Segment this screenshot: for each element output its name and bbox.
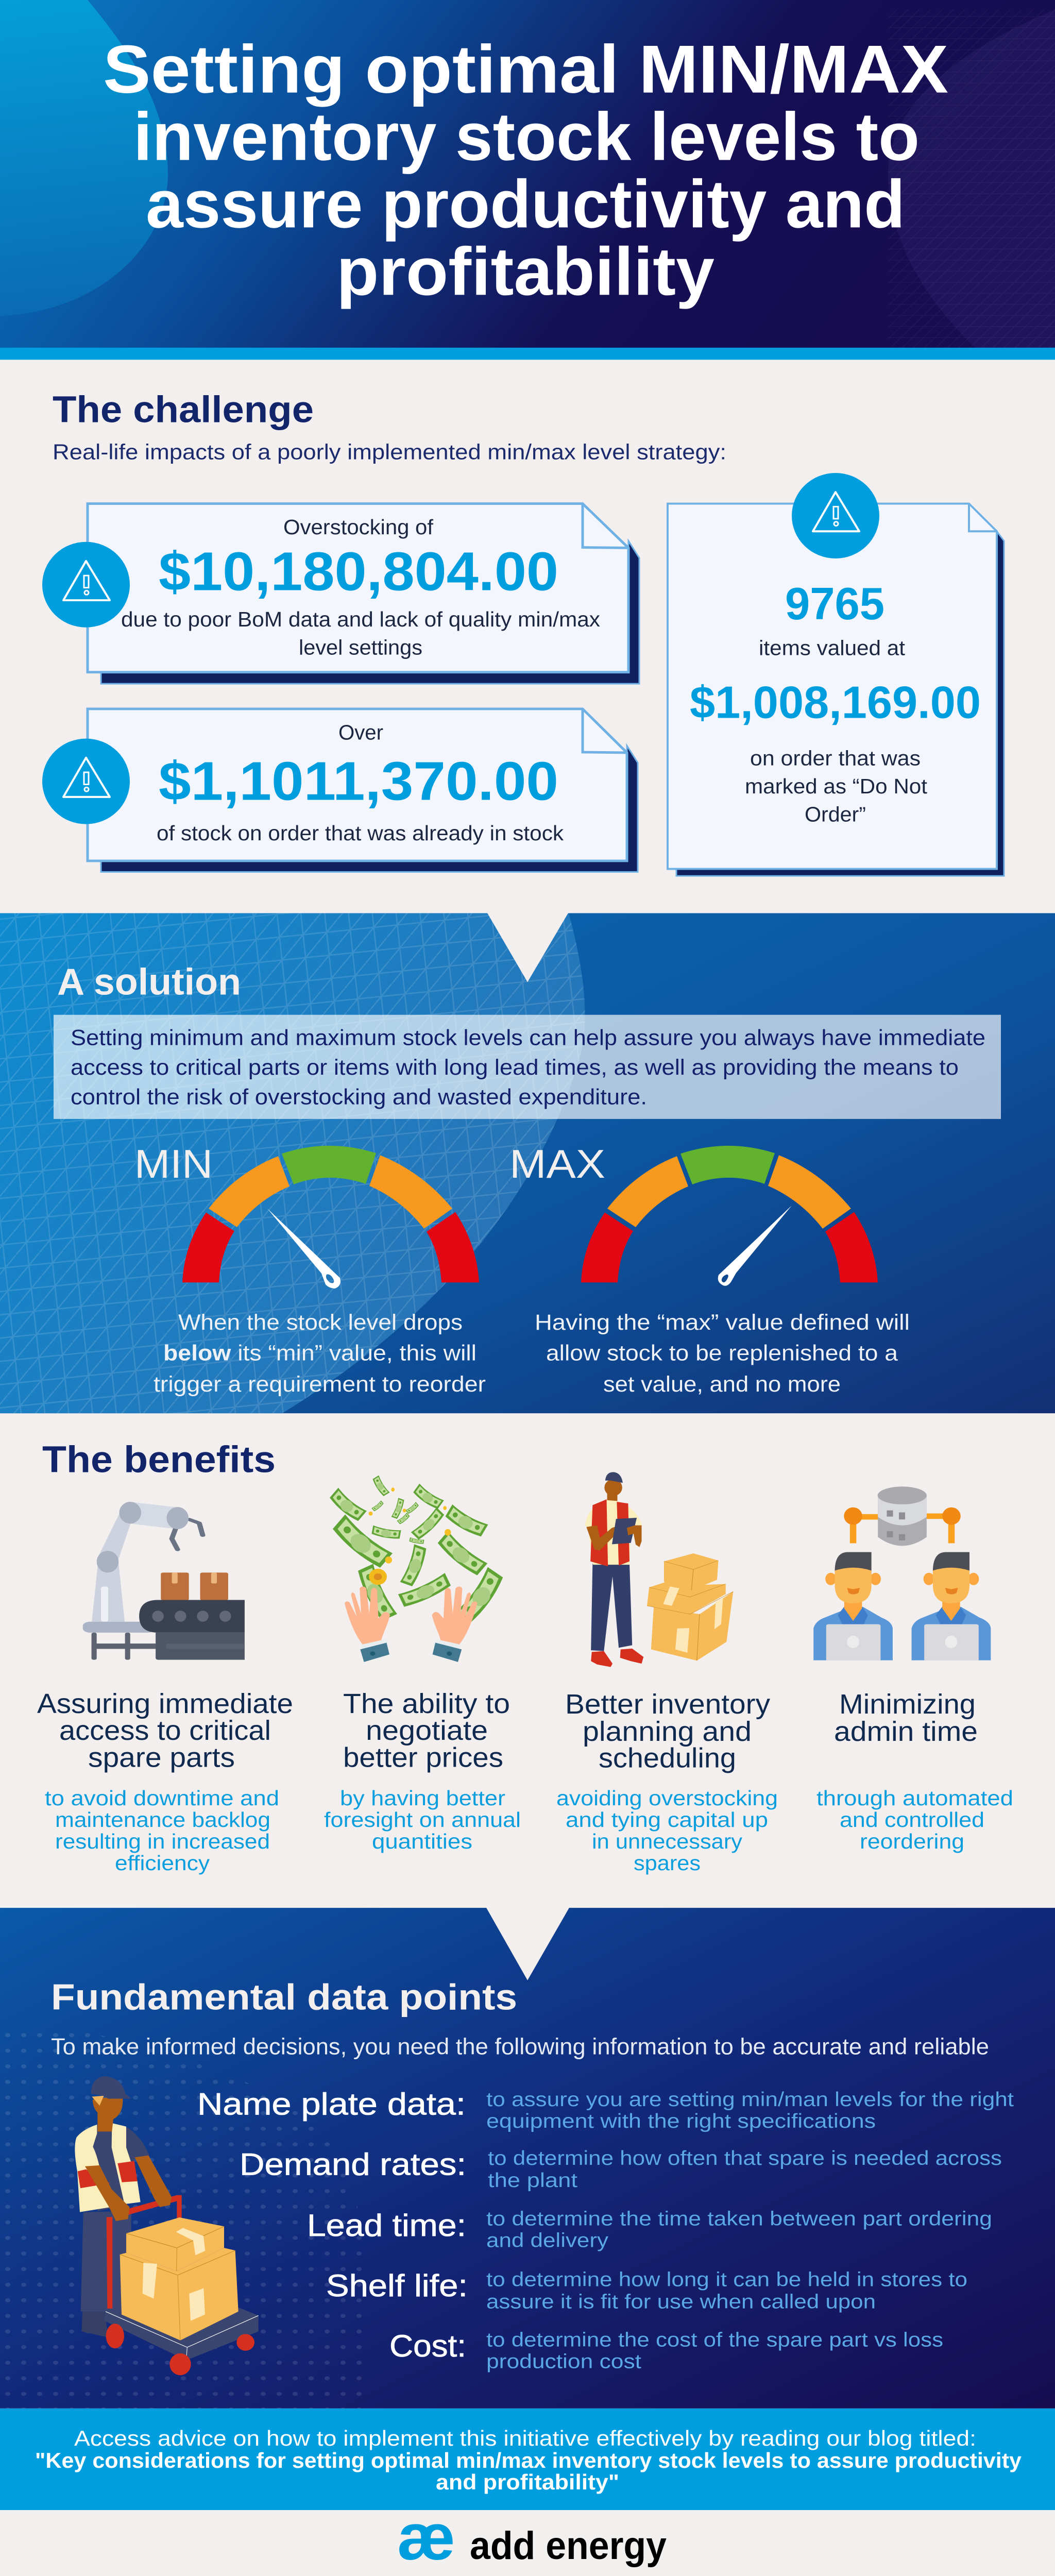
footer logo: add energy <box>470 2524 667 2568</box>
header banner <box>0 0 1055 348</box>
benefit heading 3: scheduling <box>599 1742 736 1774</box>
data row: shelf life: to determine how long it can be held in stores to <box>486 2268 967 2291</box>
icon: money and hands <box>328 1476 505 1662</box>
benefit text 1: efficiency <box>115 1851 210 1875</box>
title: inventory stock levels to <box>133 99 920 175</box>
card: do not order items: Order” <box>805 802 866 826</box>
card: do not order items: $1,008,169.00 <box>690 677 981 727</box>
card: stock already on order: Over <box>338 720 383 744</box>
benefit heading 1: Assuring immediate <box>37 1688 293 1719</box>
benefit text 1: resulting in increased <box>55 1829 270 1853</box>
data row: cost: Cost: <box>389 2329 466 2363</box>
data row: lead time <box>307 2208 992 2251</box>
icon: warning 2 <box>42 739 130 824</box>
panel: a solution <box>0 912 1055 1413</box>
benefit heading 4: admin time <box>834 1716 978 1747</box>
caption: min: below its “min” value, this will <box>163 1341 477 1366</box>
benefit heading 3: Better inventory <box>565 1689 771 1720</box>
benefit heading 1 <box>37 1688 293 1773</box>
operator two <box>912 1552 991 1660</box>
title: assure productivity and <box>146 166 905 242</box>
benefit text 3: avoiding overstocking <box>556 1786 778 1810</box>
benefit text 3: and tying capital up <box>566 1807 768 1832</box>
footer logo: æ <box>397 2501 455 2573</box>
dots texture <box>0 2023 370 2409</box>
MAX label: MAX <box>509 1141 605 1187</box>
card: overstocking: level settings <box>299 635 422 659</box>
card: do not order items: on order that was <box>750 746 921 770</box>
benefit text 2: foresight on annual <box>324 1807 521 1832</box>
data row: cost <box>389 2329 943 2373</box>
benefit heading 4 <box>834 1689 978 1747</box>
caption: min: When the stock level drops <box>178 1311 463 1335</box>
caption: max: set value, and no more <box>603 1372 841 1397</box>
title: profitability <box>336 234 714 310</box>
data row: cost: to determine the cost of the spare part vs loss <box>486 2329 943 2351</box>
panel: the challenge <box>42 389 1004 876</box>
data row: name plate data: to assure you are setting min/man levels for the right <box>486 2088 1014 2111</box>
card: overstocking: due to poor BoM data and lack of quality min/max <box>121 607 600 631</box>
title <box>103 31 948 310</box>
card: stock already on order: of stock on order that was already in stock <box>157 821 564 845</box>
benefit text 4: and controlled <box>840 1807 984 1832</box>
data row: shelf life <box>326 2268 967 2313</box>
benefit text 2: quantities <box>372 1829 472 1853</box>
panel: the benefits <box>37 1439 1013 1875</box>
icon: worker with clipboard and boxes <box>585 1472 733 1667</box>
caption: min: trigger a requirement to reorder <box>154 1372 486 1397</box>
caption: min <box>154 1311 486 1397</box>
caption: max: Having the “max” value defined will <box>535 1311 910 1335</box>
decorative sphere right <box>888 10 1055 348</box>
chart: MIN gauge <box>182 1146 479 1289</box>
needle <box>718 1206 792 1286</box>
data row: shelf life: assure it is fit for use when called upon <box>486 2291 876 2313</box>
benefit text 4: reordering <box>860 1829 964 1853</box>
data row: demand rates: Demand rates: <box>240 2147 466 2182</box>
benefit text 3: spares <box>634 1851 701 1875</box>
benefit text 3 <box>556 1786 778 1875</box>
benefit heading 2 <box>343 1688 510 1773</box>
benefit text 4 <box>816 1786 1013 1853</box>
blue strip under header <box>0 348 1055 360</box>
solution light curve <box>0 913 585 1413</box>
benefit heading 2: negotiate <box>366 1715 488 1746</box>
data row: lead time: Lead time: <box>307 2208 466 2243</box>
card: do not order items: items valued at <box>759 636 905 659</box>
benefit heading 1: spare parts <box>88 1742 235 1773</box>
panel: fundamental data points <box>0 1907 1055 2409</box>
solution heading: A solution <box>57 961 241 1003</box>
operator one <box>813 1552 893 1660</box>
data row: name plate data: Name plate data: <box>197 2087 466 2121</box>
title: Setting optimal MIN/MAX <box>103 31 948 107</box>
benefit text 1: maintenance backlog <box>55 1807 270 1832</box>
card: overstocking <box>88 504 639 684</box>
chart: MAX gauge <box>581 1146 878 1286</box>
solution mesh texture <box>0 913 585 1413</box>
benefit heading 3: planning and <box>583 1716 752 1747</box>
card: do not order items: marked as “Do Not <box>745 774 927 798</box>
caption: max: allow stock to be replenished to a <box>546 1341 898 1366</box>
card: do not order items <box>668 504 1004 876</box>
callout: blog link band: "Key considerations for setting optimal min/max inventory stock levels to assure productivity <box>35 2449 1022 2473</box>
icon: warning 3 <box>792 473 879 558</box>
benefit heading 4: Minimizing <box>839 1689 976 1720</box>
icon: warning 1 <box>42 542 130 628</box>
solution text box <box>54 1015 1001 1119</box>
callout: blog link band: and profitability" <box>436 2470 619 2495</box>
card: stock already on order <box>88 709 638 872</box>
card: overstocking: Overstocking of <box>283 515 433 539</box>
benefit text 1 <box>45 1786 279 1875</box>
benefit heading 2: better prices <box>343 1742 503 1773</box>
footer logo <box>0 2501 1055 2576</box>
needle <box>267 1209 341 1289</box>
benefits heading: The benefits <box>42 1439 276 1480</box>
benefit heading 2: The ability to <box>343 1688 510 1719</box>
data row: cost: production cost <box>486 2350 641 2373</box>
icon: two operators with database <box>813 1486 991 1660</box>
solution text box: control the risk of overstocking and wasted expenditure. <box>71 1085 647 1109</box>
caption: max <box>535 1311 910 1397</box>
benefit text 2: by having better <box>340 1786 505 1810</box>
data row: demand rates: to determine how often that spare is needed across <box>488 2147 1002 2170</box>
card: overstocking: $10,180,804.00 <box>159 541 558 602</box>
solution text box: Setting minimum and maximum stock levels can help assure you always have immediate <box>71 1026 985 1050</box>
challenge intro: Real-life impacts of a poorly implemented min/max level strategy: <box>53 440 726 464</box>
benefit text 2 <box>324 1786 521 1853</box>
benefit text 4: through automated <box>816 1786 1013 1810</box>
benefit heading 3 <box>565 1689 771 1774</box>
card: stock already on order: $1,1011,370.00 <box>159 751 558 811</box>
icon: robot arm and conveyor <box>83 1502 245 1660</box>
callout: blog link band <box>0 2409 1055 2510</box>
data row: lead time: to determine the time taken between part ordering <box>486 2208 992 2230</box>
header mesh texture <box>888 10 1055 348</box>
benefit text 3: in unnecessary <box>592 1829 742 1853</box>
data intro: To make informed decisions, you need the following information to be accurate and reliable <box>51 2033 989 2059</box>
decorative sphere left <box>0 0 168 316</box>
MIN label: MIN <box>134 1141 213 1187</box>
benefit text 1: to avoid downtime and <box>45 1786 279 1810</box>
callout: blog link band: Access advice on how to implement this initiative effectively by reading our blog titled: <box>74 2427 976 2451</box>
benefit heading 1: access to critical <box>59 1715 271 1746</box>
data row: name plate data <box>197 2087 1014 2132</box>
card: do not order items: 9765 <box>785 578 884 629</box>
solution text box: access to critical parts or items with long lead times, as well as providing the means to <box>71 1055 959 1080</box>
challenge heading: The challenge <box>53 389 314 430</box>
data row: name plate data: equipment with the right specifications <box>486 2110 876 2132</box>
data heading: Fundamental data points <box>51 1977 517 2018</box>
data row: lead time: and delivery <box>486 2229 608 2251</box>
arrow notch <box>487 912 569 982</box>
icon: worker with trolley <box>75 2076 259 2375</box>
data row: shelf life: Shelf life: <box>326 2268 468 2303</box>
data row: demand rates: the plant <box>488 2170 577 2192</box>
arrow notch <box>486 1907 570 1980</box>
data row: demand rates <box>240 2147 1002 2192</box>
